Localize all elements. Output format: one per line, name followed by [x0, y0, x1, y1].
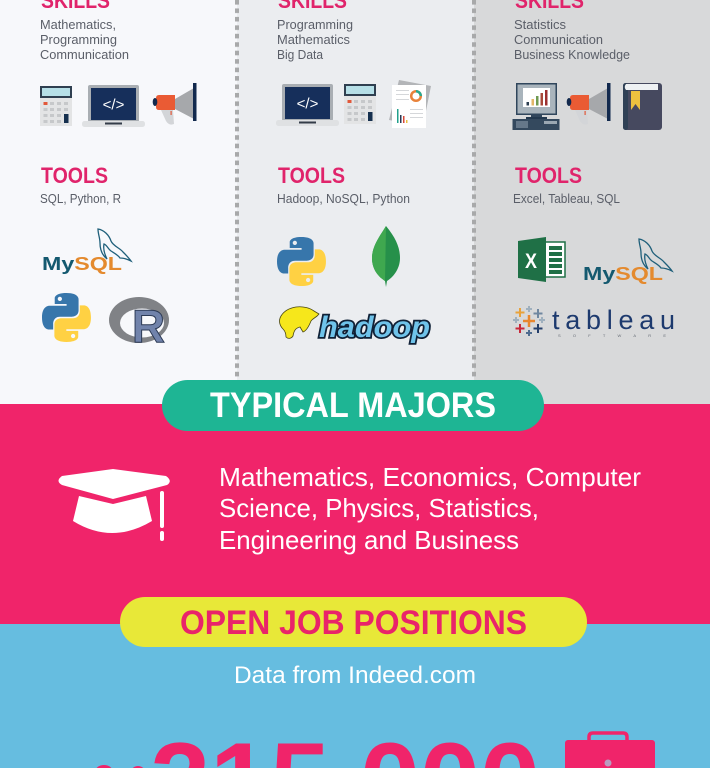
panel: typical majors [0, 380, 710, 624]
logo: R: R [132, 300, 165, 352]
panel: column three content [512, 0, 675, 338]
icon: laptop [82, 85, 145, 127]
pill: open job positions heading [120, 597, 587, 647]
text: tools list: SQL, Python, R [40, 191, 121, 206]
panel: middle column background [237, 0, 474, 404]
icon: laptop [276, 84, 339, 126]
icon: report [389, 80, 431, 128]
icon: megaphone [153, 83, 196, 125]
text: skills list: Big Data [277, 47, 324, 62]
pill: typical majors heading: TYPICAL MAJORS [210, 386, 496, 425]
icon: desktop computer with chart [512, 83, 560, 130]
pill: open job positions heading: OPEN JOB POSITIONS [180, 604, 527, 642]
text: skills list: Statistics [514, 17, 566, 32]
panel: right column background [474, 0, 710, 404]
icon: figure partly visible [95, 765, 145, 768]
text: majors list [219, 462, 641, 555]
logo: Excel: X [525, 250, 537, 273]
heading: tools: TOOLS [41, 163, 108, 188]
logo: Python [277, 237, 326, 286]
logo: Hadoop [280, 307, 430, 344]
pill: typical majors heading [162, 380, 544, 431]
text: skills list [40, 17, 129, 62]
icon: calculator [40, 86, 72, 126]
text: skills list: Programming [40, 32, 117, 47]
text: tools list: Excel, Tableau, SQL [513, 191, 620, 206]
icon: book [623, 83, 662, 130]
text: skills list: Mathematics, [40, 17, 116, 32]
panel: column one content [40, 0, 196, 352]
icon: calculator [344, 84, 376, 124]
text: majors list: Mathematics, Economics, Computer [219, 462, 641, 492]
icon: megaphone [567, 83, 610, 125]
logo: MySQL [42, 229, 131, 274]
text: skills list: Mathematics [277, 32, 350, 47]
heading: tools: TOOLS [515, 163, 582, 188]
logo: Tableau: tableau [552, 305, 675, 335]
logo: Python [42, 293, 91, 342]
icon: briefcase [565, 733, 655, 768]
text: majors list: Science, Physics, Statistics, [219, 493, 539, 523]
logo: R [109, 297, 169, 352]
panel: open job positions [0, 597, 710, 768]
text: majors list: Engineering and Business [219, 525, 519, 555]
text: data source: Data from Indeed.com [234, 662, 476, 689]
logo: Tableau: SOFTWARE [558, 333, 666, 338]
text: skills list: Communication [40, 47, 129, 62]
icon: graduation cap [58, 469, 170, 541]
text: skills list: Programming [277, 17, 353, 32]
text: skills list [514, 17, 630, 62]
text: tools list: Hadoop, NoSQL, Python [277, 191, 410, 206]
logo: Hadoop: hadoop [319, 311, 430, 344]
heading: tools: TOOLS [278, 163, 345, 188]
panel: left column background [0, 0, 237, 404]
text: skills list [277, 17, 353, 62]
text: skills list: Business Knowledge [514, 47, 630, 62]
panel: column two content [276, 0, 431, 344]
logo: MySQL [583, 239, 672, 284]
logo: Tableau [513, 305, 675, 338]
text: skills list: Communication [514, 32, 603, 47]
logo: Excel [518, 237, 565, 282]
logo: MongoDB leaf [372, 226, 400, 287]
